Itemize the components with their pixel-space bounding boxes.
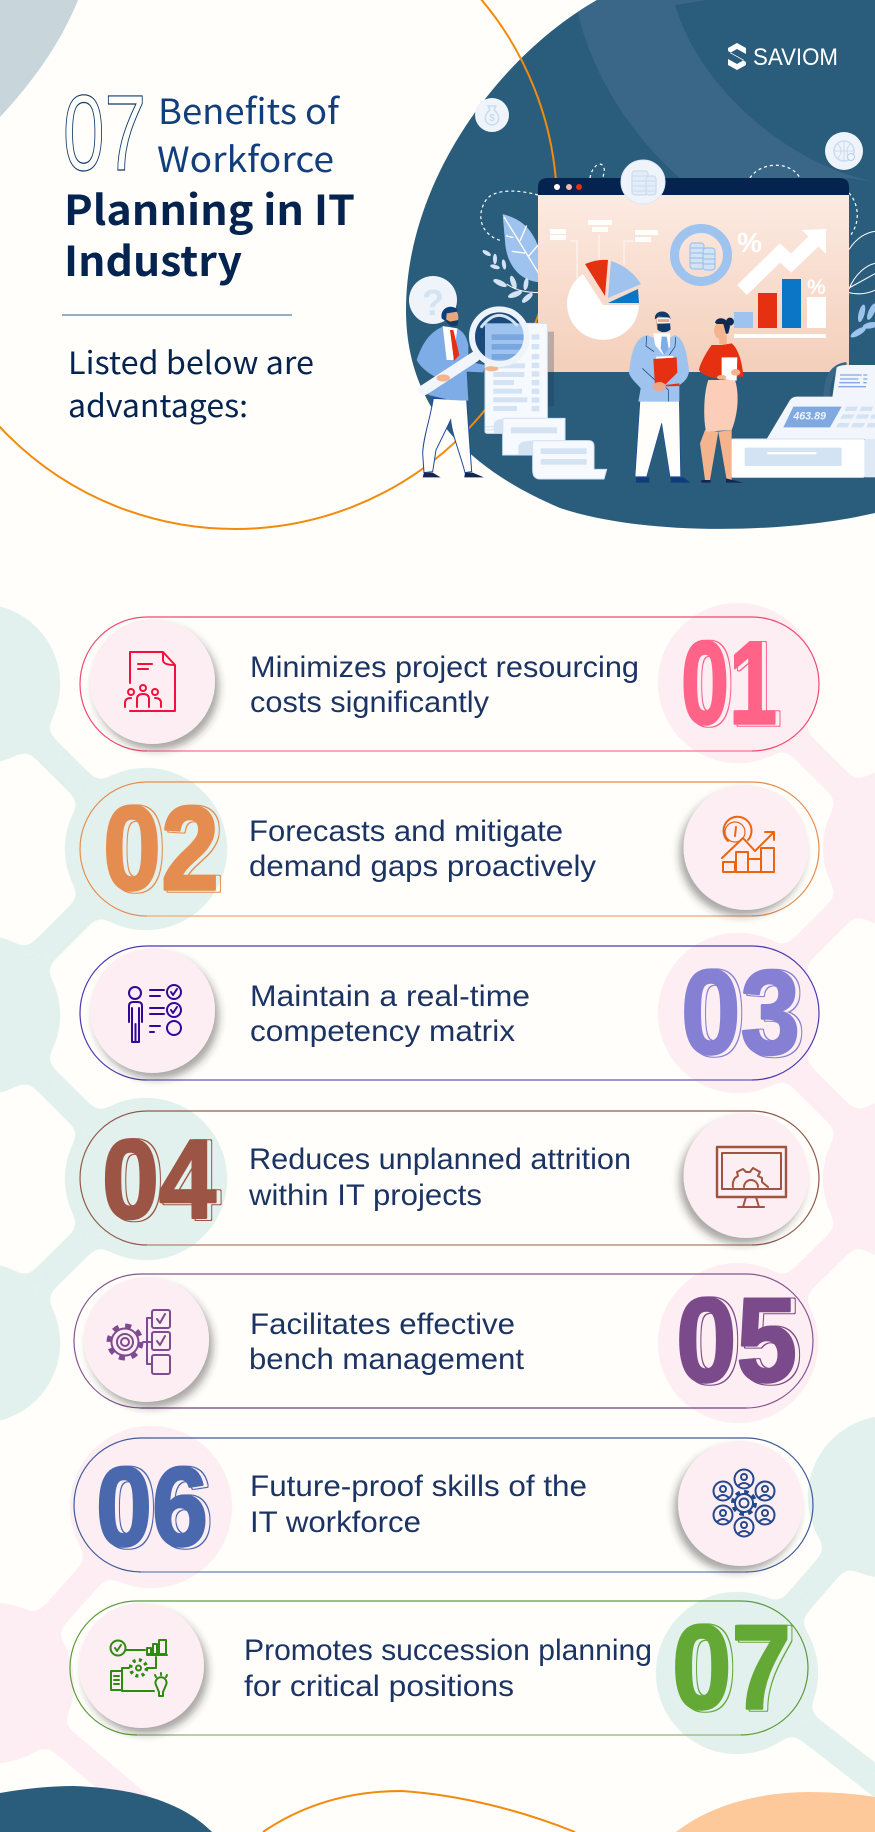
background network: pink right (658, 603, 875, 1423)
text: for critical positions (244, 1670, 514, 1703)
cash register (731, 365, 875, 477)
growth arrow and bar chart: % (737, 227, 762, 258)
man with folder (629, 312, 691, 483)
text: Forecasts and mitigate (249, 815, 563, 848)
benefit 06 (74, 1438, 813, 1572)
number 04: 04 (102, 1117, 216, 1242)
icon: gauge and growth chart (684, 785, 808, 910)
benefit 05 (74, 1274, 813, 1408)
dark blob bottom left (0, 1786, 212, 1832)
text: Reduces unplanned attrition (249, 1143, 631, 1176)
title line: Benefits of: Benefits of (158, 84, 341, 135)
donut with database icon (674, 228, 728, 282)
peach blob bottom right (676, 1792, 875, 1832)
text (244, 1634, 652, 1703)
number 01: 01 (681, 618, 777, 750)
text: IT workforce (250, 1506, 421, 1539)
man: legs (423, 398, 472, 473)
icon: document and team (90, 619, 215, 744)
icon: question mark (409, 276, 457, 324)
title (63, 72, 355, 288)
benefit 03 (80, 946, 819, 1080)
intro text: advantages: (68, 381, 248, 426)
paper receipt (485, 323, 607, 479)
number 03: 03 (681, 946, 800, 1080)
text (248, 1143, 631, 1212)
icon: question mark: ? (422, 282, 444, 323)
number 05: 05 (676, 1274, 797, 1408)
title line: Industry: Industry (64, 228, 242, 288)
background network: green lower right (656, 1416, 875, 1815)
text: costs significantly (250, 686, 489, 719)
text: competency matrix (250, 1015, 515, 1048)
magnifier (424, 309, 547, 390)
background network: pink lower left (0, 1426, 232, 1815)
text (250, 1470, 587, 1539)
growth arrow and bar chart (734, 227, 826, 338)
man: shoes (423, 473, 484, 477)
text: bench management (249, 1343, 525, 1376)
icon: money bag (475, 98, 509, 132)
icon: succession flow (79, 1603, 204, 1728)
dark header blob (406, 0, 875, 529)
outlined number 07: 07 (63, 72, 146, 193)
decorative blob top left (0, 0, 78, 117)
text: within IT projects (248, 1179, 482, 1212)
logo: Saviom: SAVIOM (753, 44, 838, 71)
icon: gear and checklist (84, 1277, 209, 1402)
illustration: leaves and dashed loops (481, 164, 875, 339)
icon: money bag: $ (489, 113, 495, 124)
intro text: Listed below are (68, 338, 314, 383)
floating icon badges (409, 98, 863, 324)
man: jacket and head (417, 307, 498, 401)
text (250, 980, 530, 1048)
illustration: receipt and man with magnifier (417, 307, 607, 479)
cash register: 463.89 (792, 410, 826, 422)
benefit 04 (80, 1111, 819, 1245)
text: Minimizes project resourcing (250, 651, 639, 684)
title line: Planning in IT: Planning in IT (64, 177, 355, 237)
text: Promotes succession planning (244, 1634, 652, 1667)
text (249, 815, 596, 883)
growth arrow and bar chart: % (807, 276, 826, 299)
icon: database (621, 160, 665, 204)
pie chart (550, 220, 658, 340)
number 06: 06 (96, 1444, 208, 1570)
title line: Workforce: Workforce (157, 132, 334, 183)
text: Maintain a real-time (250, 980, 530, 1013)
intro text (68, 338, 314, 426)
orange arc bottom (263, 1791, 575, 1832)
number 07: 07 (672, 1600, 791, 1734)
benefit 02 (80, 782, 819, 916)
text: Facilitates effective (250, 1308, 515, 1341)
benefit 01 (80, 617, 819, 751)
woman with document (699, 318, 743, 483)
orange circle outline (0, 0, 557, 529)
text (249, 1308, 525, 1376)
text: demand gaps proactively (249, 850, 596, 883)
benefit 07 (70, 1600, 808, 1735)
background network: green left (0, 604, 227, 1423)
number 02: 02 (103, 782, 219, 916)
text: Future-proof skills of the (250, 1470, 587, 1503)
illustration: dashboard screen (538, 178, 849, 372)
icon: globe (825, 132, 863, 170)
icon: monitor with gear (684, 1113, 808, 1238)
icon: workforce around gear (678, 1441, 803, 1566)
icon: person and checklist (90, 948, 215, 1073)
illustration: colleagues and cash register (629, 312, 875, 483)
bottom shapes (0, 1786, 875, 1832)
text (250, 651, 639, 719)
